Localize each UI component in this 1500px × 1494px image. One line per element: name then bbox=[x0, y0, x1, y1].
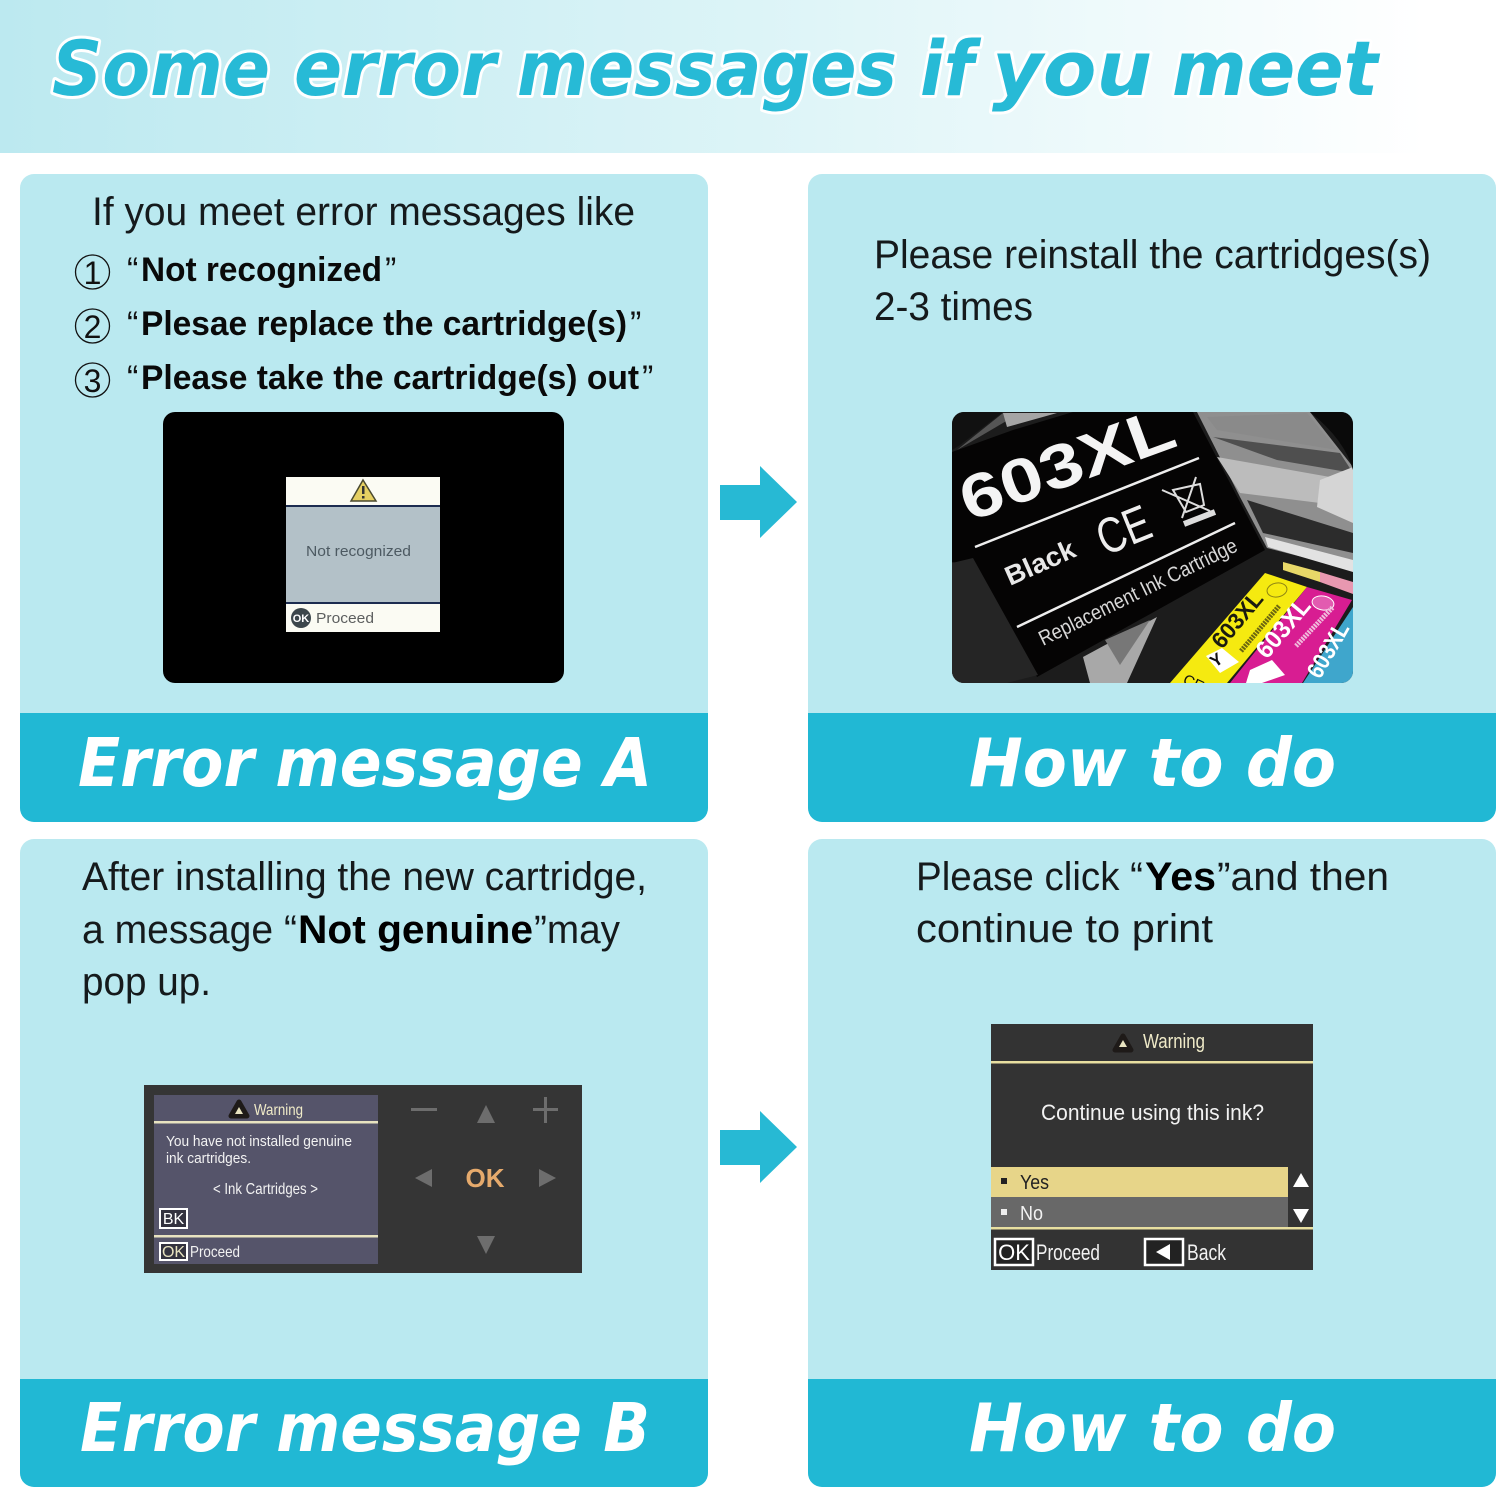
title: if bbox=[920, 24, 982, 113]
screen: not genuine warning: OK bbox=[466, 1163, 505, 1193]
instruction text: Yes bbox=[1145, 855, 1216, 899]
title: you bbox=[992, 24, 1152, 113]
heading: error message A: Error message A bbox=[78, 724, 652, 802]
title: meet bbox=[1172, 24, 1381, 113]
list of error messages: “ bbox=[127, 359, 138, 397]
instruction text: Please click “ bbox=[916, 855, 1143, 899]
title: Some bbox=[52, 24, 270, 113]
screen: continue using this ink: Back bbox=[1187, 1240, 1227, 1265]
photo: 603XL cartridges bbox=[952, 412, 1353, 683]
yellow, magenta and cyan cartridges: Y bbox=[1206, 649, 1227, 671]
cartridge label text: 603XL bbox=[950, 394, 1184, 535]
description text: ”may bbox=[534, 908, 620, 952]
screen: not genuine warning: You have not installed genuine bbox=[166, 1134, 352, 1150]
yellow, magenta and cyan cartridges: 603XL bbox=[1206, 586, 1268, 653]
screen: not genuine warning: < Ink Cartridges > bbox=[213, 1181, 318, 1198]
screen: continue using this ink: OK bbox=[998, 1240, 1030, 1265]
list of error messages: Plesae replace the cartridge(s) bbox=[141, 305, 627, 343]
title bbox=[52, 24, 1381, 113]
screen: not genuine warning: Warning bbox=[254, 1102, 303, 1119]
screen: continue using this ink bbox=[991, 1024, 1313, 1270]
instruction text: Please reinstall the cartridges(s) bbox=[874, 233, 1431, 277]
list of error messages: ” bbox=[630, 305, 641, 343]
panel: error message A bbox=[20, 174, 708, 822]
title: error bbox=[294, 24, 500, 113]
yellow, magenta and cyan cartridges: 603XL bbox=[1250, 592, 1317, 664]
icon: crossed-out bin bbox=[1162, 477, 1215, 524]
instruction text: ”and then bbox=[1217, 855, 1389, 899]
heading: how to do: How to do bbox=[969, 724, 1336, 802]
screen: not recognized bbox=[163, 412, 564, 683]
screen: not recognized: Not recognized bbox=[306, 543, 411, 560]
screen: continue using this ink: Proceed bbox=[1036, 1240, 1100, 1265]
list of error messages: ” bbox=[642, 359, 653, 397]
heading: error message B: Error message B bbox=[80, 1389, 650, 1467]
instruction text bbox=[874, 233, 1431, 329]
arrow: B to how to do bbox=[720, 1111, 797, 1183]
screen: continue using this ink: No bbox=[1020, 1203, 1043, 1225]
photo: 603XL cartridges: CE bbox=[1088, 494, 1159, 566]
description text: After installing the new cartridge, bbox=[82, 855, 647, 899]
instruction text: 2-3 times bbox=[874, 285, 1033, 329]
yellow, magenta and cyan cartridges: CE bbox=[1180, 671, 1206, 695]
screen: continue using this ink: Warning bbox=[1143, 1031, 1205, 1053]
list of error messages: ” bbox=[385, 251, 396, 289]
list of error messages: Please take the cartridge(s) out bbox=[141, 359, 639, 397]
control keys bbox=[411, 1097, 558, 1254]
screen: not genuine warning bbox=[144, 1085, 582, 1273]
screen: not genuine warning: ink cartridges. bbox=[166, 1151, 251, 1167]
description text: Not genuine bbox=[298, 908, 533, 952]
list of error messages bbox=[76, 251, 653, 399]
arrow: A to how to do bbox=[720, 466, 797, 538]
title: messages bbox=[517, 24, 897, 113]
photo: 603XL cartridges: Black bbox=[1000, 534, 1081, 591]
instruction text: continue to print bbox=[916, 907, 1213, 951]
description text bbox=[82, 855, 647, 1004]
panel: how to do, reinstall bbox=[808, 174, 1496, 822]
panel: how to do, click yes bbox=[808, 839, 1496, 1487]
photo: 603XL cartridges: Replacement Ink Cartridge bbox=[1035, 534, 1241, 650]
screen: not recognized: Proceed bbox=[316, 610, 374, 627]
list of error messages: 3 bbox=[84, 363, 101, 399]
yellow, magenta and cyan cartridges bbox=[1170, 573, 1353, 683]
list of error messages: Not recognized bbox=[141, 251, 382, 289]
heading: how to do: How to do bbox=[969, 1389, 1336, 1467]
screen: continue using this ink: Yes bbox=[1020, 1172, 1049, 1194]
screen: not recognized: OK bbox=[293, 613, 309, 625]
screen: not genuine warning: BK bbox=[163, 1211, 184, 1228]
screen: not genuine warning: Proceed bbox=[190, 1244, 240, 1261]
header band bbox=[0, 0, 1500, 153]
list of error messages: 2 bbox=[84, 309, 101, 345]
description text: a message “ bbox=[82, 908, 297, 952]
screen: continue using this ink: Continue using this ink? bbox=[1041, 1100, 1264, 1125]
screen: not genuine warning: OK bbox=[162, 1244, 185, 1261]
list of error messages: 1 bbox=[84, 255, 101, 291]
yellow, magenta and cyan cartridges: 603XL bbox=[1302, 618, 1355, 683]
panel: error message B bbox=[20, 839, 708, 1487]
description text: pop up. bbox=[82, 960, 211, 1004]
list of error messages: “ bbox=[127, 251, 138, 289]
list of error messages: “ bbox=[127, 305, 138, 343]
instruction text bbox=[916, 855, 1389, 951]
intro text: If you meet error messages like bbox=[92, 190, 635, 234]
